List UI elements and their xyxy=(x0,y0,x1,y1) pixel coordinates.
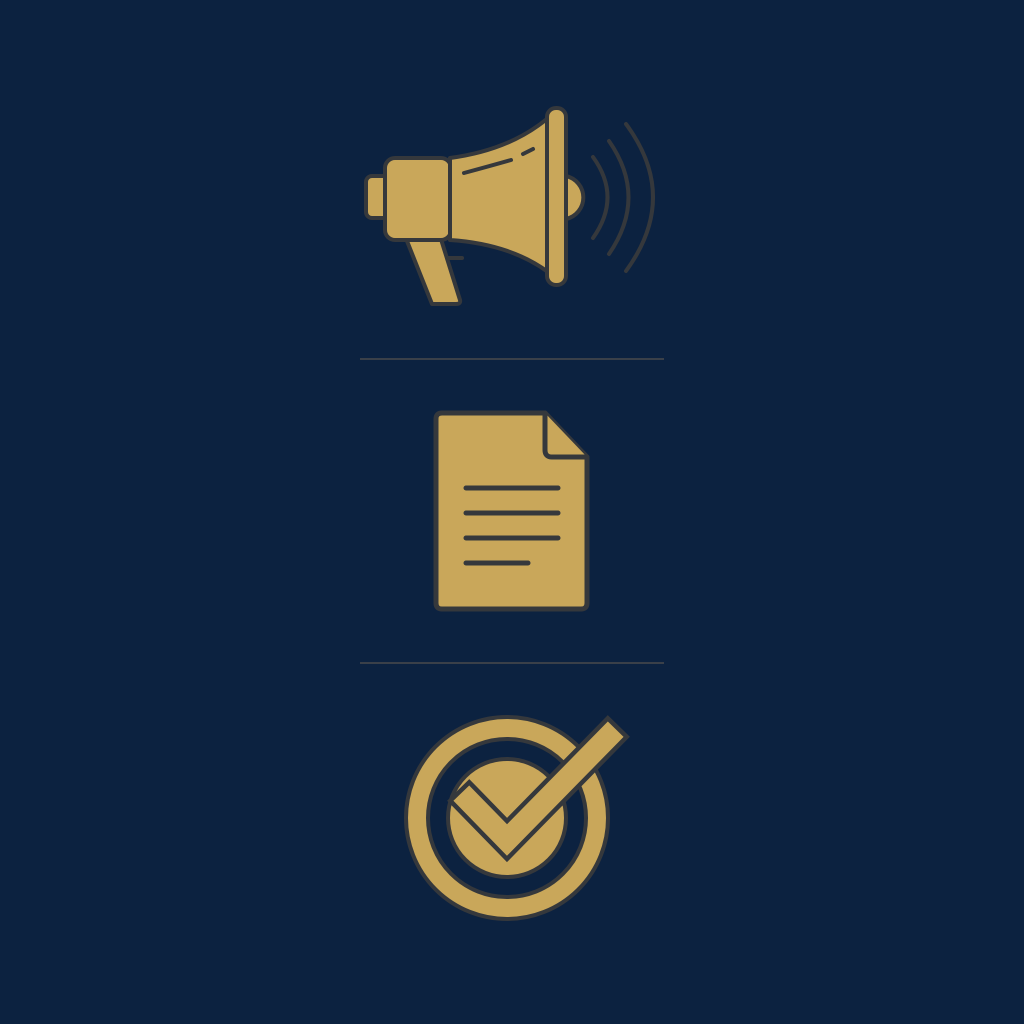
icon: checkmark target xyxy=(417,728,608,908)
icon: megaphone xyxy=(366,108,653,304)
sound waves xyxy=(593,124,653,271)
icon: document xyxy=(436,413,587,609)
